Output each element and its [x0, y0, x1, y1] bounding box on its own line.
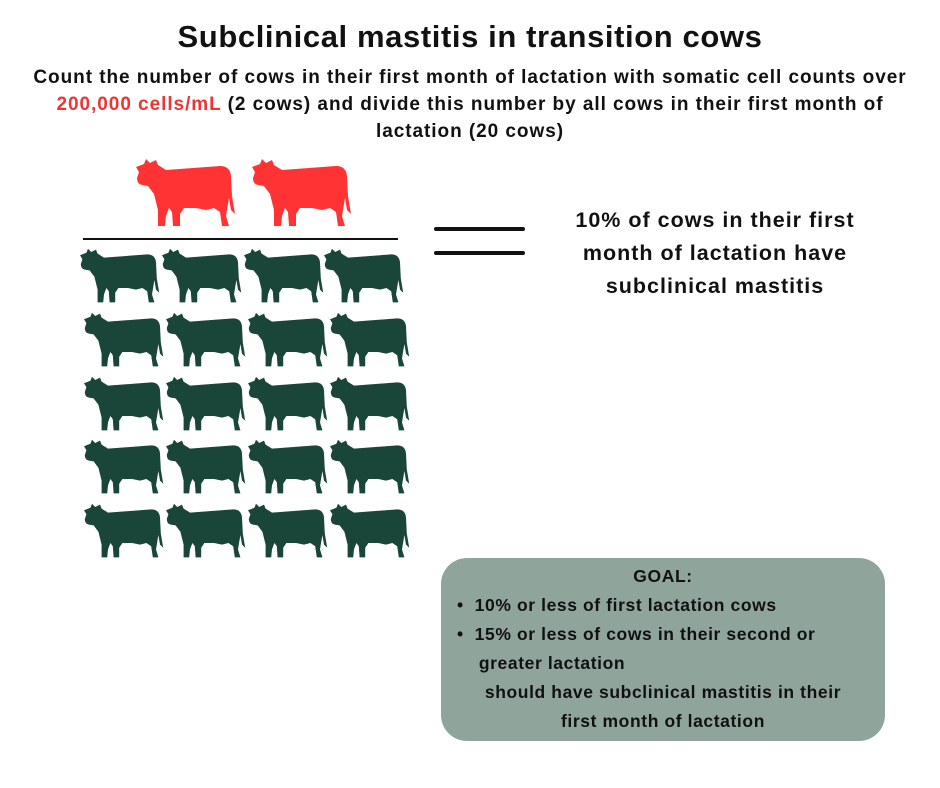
denominator: dark cows [80, 248, 410, 558]
subtitle text: Count the number of cows in their first month of lactation with somatic cell counts over [33, 67, 907, 88]
result text: month of lactation have [583, 241, 847, 265]
goal box: • 15% or less of cows in their second or [457, 624, 815, 644]
goal box: should have subclinical mastitis in their [485, 682, 841, 702]
goal box: greater lactation [479, 653, 625, 673]
subtitle text: lactation (20 cows) [376, 121, 564, 142]
result text: subclinical mastitis [606, 274, 824, 298]
result text [575, 208, 855, 298]
equals sign [434, 227, 525, 255]
result text: 10% of cows in their first [575, 208, 855, 232]
numerator: red cows [136, 159, 351, 226]
goal box: first month of lactation [561, 711, 765, 731]
goal box: GOAL: [633, 566, 693, 586]
goal box [441, 558, 885, 741]
subtitle text: 200,000 cells/mL (2 cows) and divide this number by all cows in their first month of [56, 94, 883, 115]
subtitle text [33, 67, 907, 142]
goal box: • 10% or less of first lactation cows [457, 595, 777, 615]
fraction line [83, 238, 398, 240]
title: Subclinical mastitis in transition cows [178, 19, 762, 54]
